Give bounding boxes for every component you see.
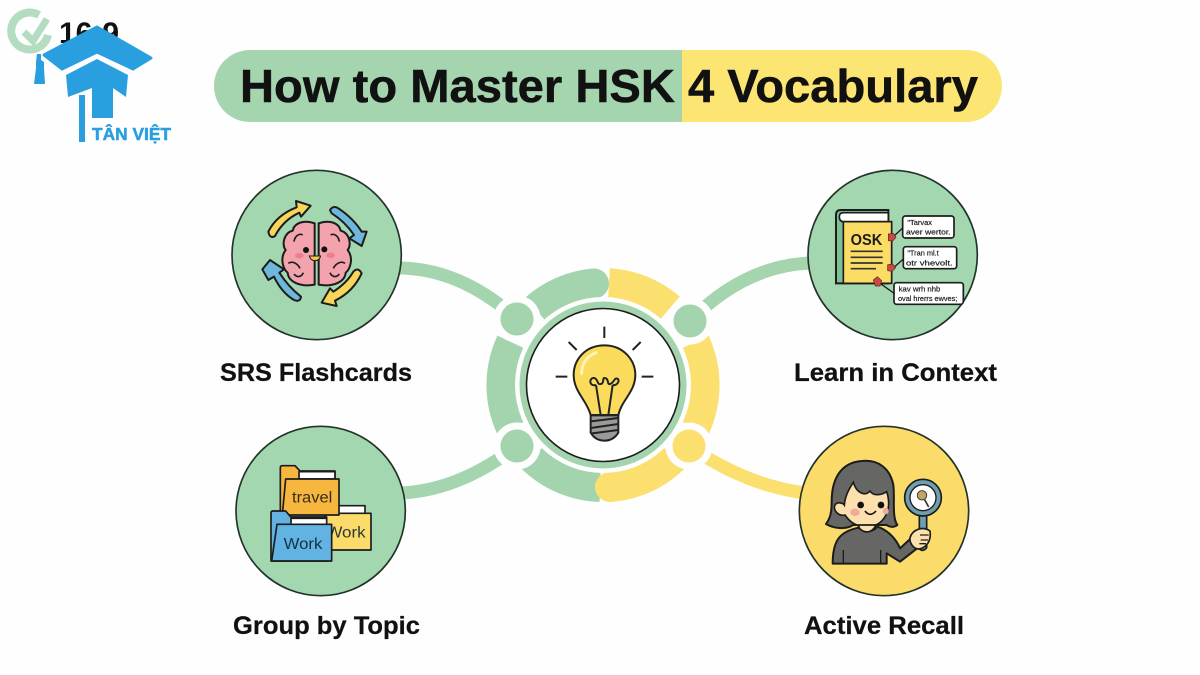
node: SRS Flashcards xyxy=(220,170,412,387)
icon panel: book with annotations: "Tran ml.t xyxy=(907,248,939,257)
icon panel: topic folders: travel xyxy=(292,490,332,507)
connector: Learn in Context to hub xyxy=(690,263,812,321)
segmented outer ring xyxy=(501,268,705,502)
connector nodes xyxy=(497,299,710,466)
logo name: TÂN VIỆT xyxy=(92,123,171,144)
label: Learn in Context xyxy=(794,359,998,387)
icon panel: girl with magnifying glass xyxy=(799,426,969,596)
icon panel: book with annotations: "Tarvax xyxy=(907,218,932,227)
icon: light bulb xyxy=(556,327,653,441)
icon panel: book with annotations xyxy=(808,170,977,340)
connector: SRS Flashcards to hub xyxy=(398,268,517,319)
label: Active Recall xyxy=(804,612,964,640)
node: Learn in Context xyxy=(794,170,998,387)
badge text: 16:9 xyxy=(59,17,119,50)
connector: Group by Topic to hub xyxy=(402,446,517,493)
node: Group by Topic xyxy=(233,426,420,640)
icon panel: book with annotations: otr vhevolt. xyxy=(906,259,953,268)
icon panel: topic folders: Work xyxy=(284,536,323,553)
title banner xyxy=(214,50,1002,122)
title: How to Master HSK 4 Vocabulary xyxy=(240,60,978,112)
icon panel: book with annotations: kav wrh nhb xyxy=(899,285,940,294)
icon panel: topic folders xyxy=(236,426,405,596)
node: Active Recall xyxy=(799,426,969,640)
central hub xyxy=(497,268,710,502)
icon: graduation cap arrow xyxy=(34,27,151,142)
label: Group by Topic xyxy=(233,612,420,640)
icon panel: topic folders: Work xyxy=(326,525,366,542)
icon: check badge xyxy=(11,13,48,50)
icon panel: brain with cycle arrows xyxy=(232,170,401,340)
label: SRS Flashcards xyxy=(220,359,412,387)
connector: Active Recall to hub xyxy=(689,446,805,493)
icon panel: book with annotations: oval hrerrs ewves; xyxy=(898,294,957,303)
hub disc xyxy=(515,297,691,473)
icon panel: book with annotations: aver wertor. xyxy=(906,228,951,237)
icon panel: book with annotations: OSK xyxy=(851,232,883,249)
logo: 16:9 badge and Tân Việt xyxy=(11,13,171,144)
